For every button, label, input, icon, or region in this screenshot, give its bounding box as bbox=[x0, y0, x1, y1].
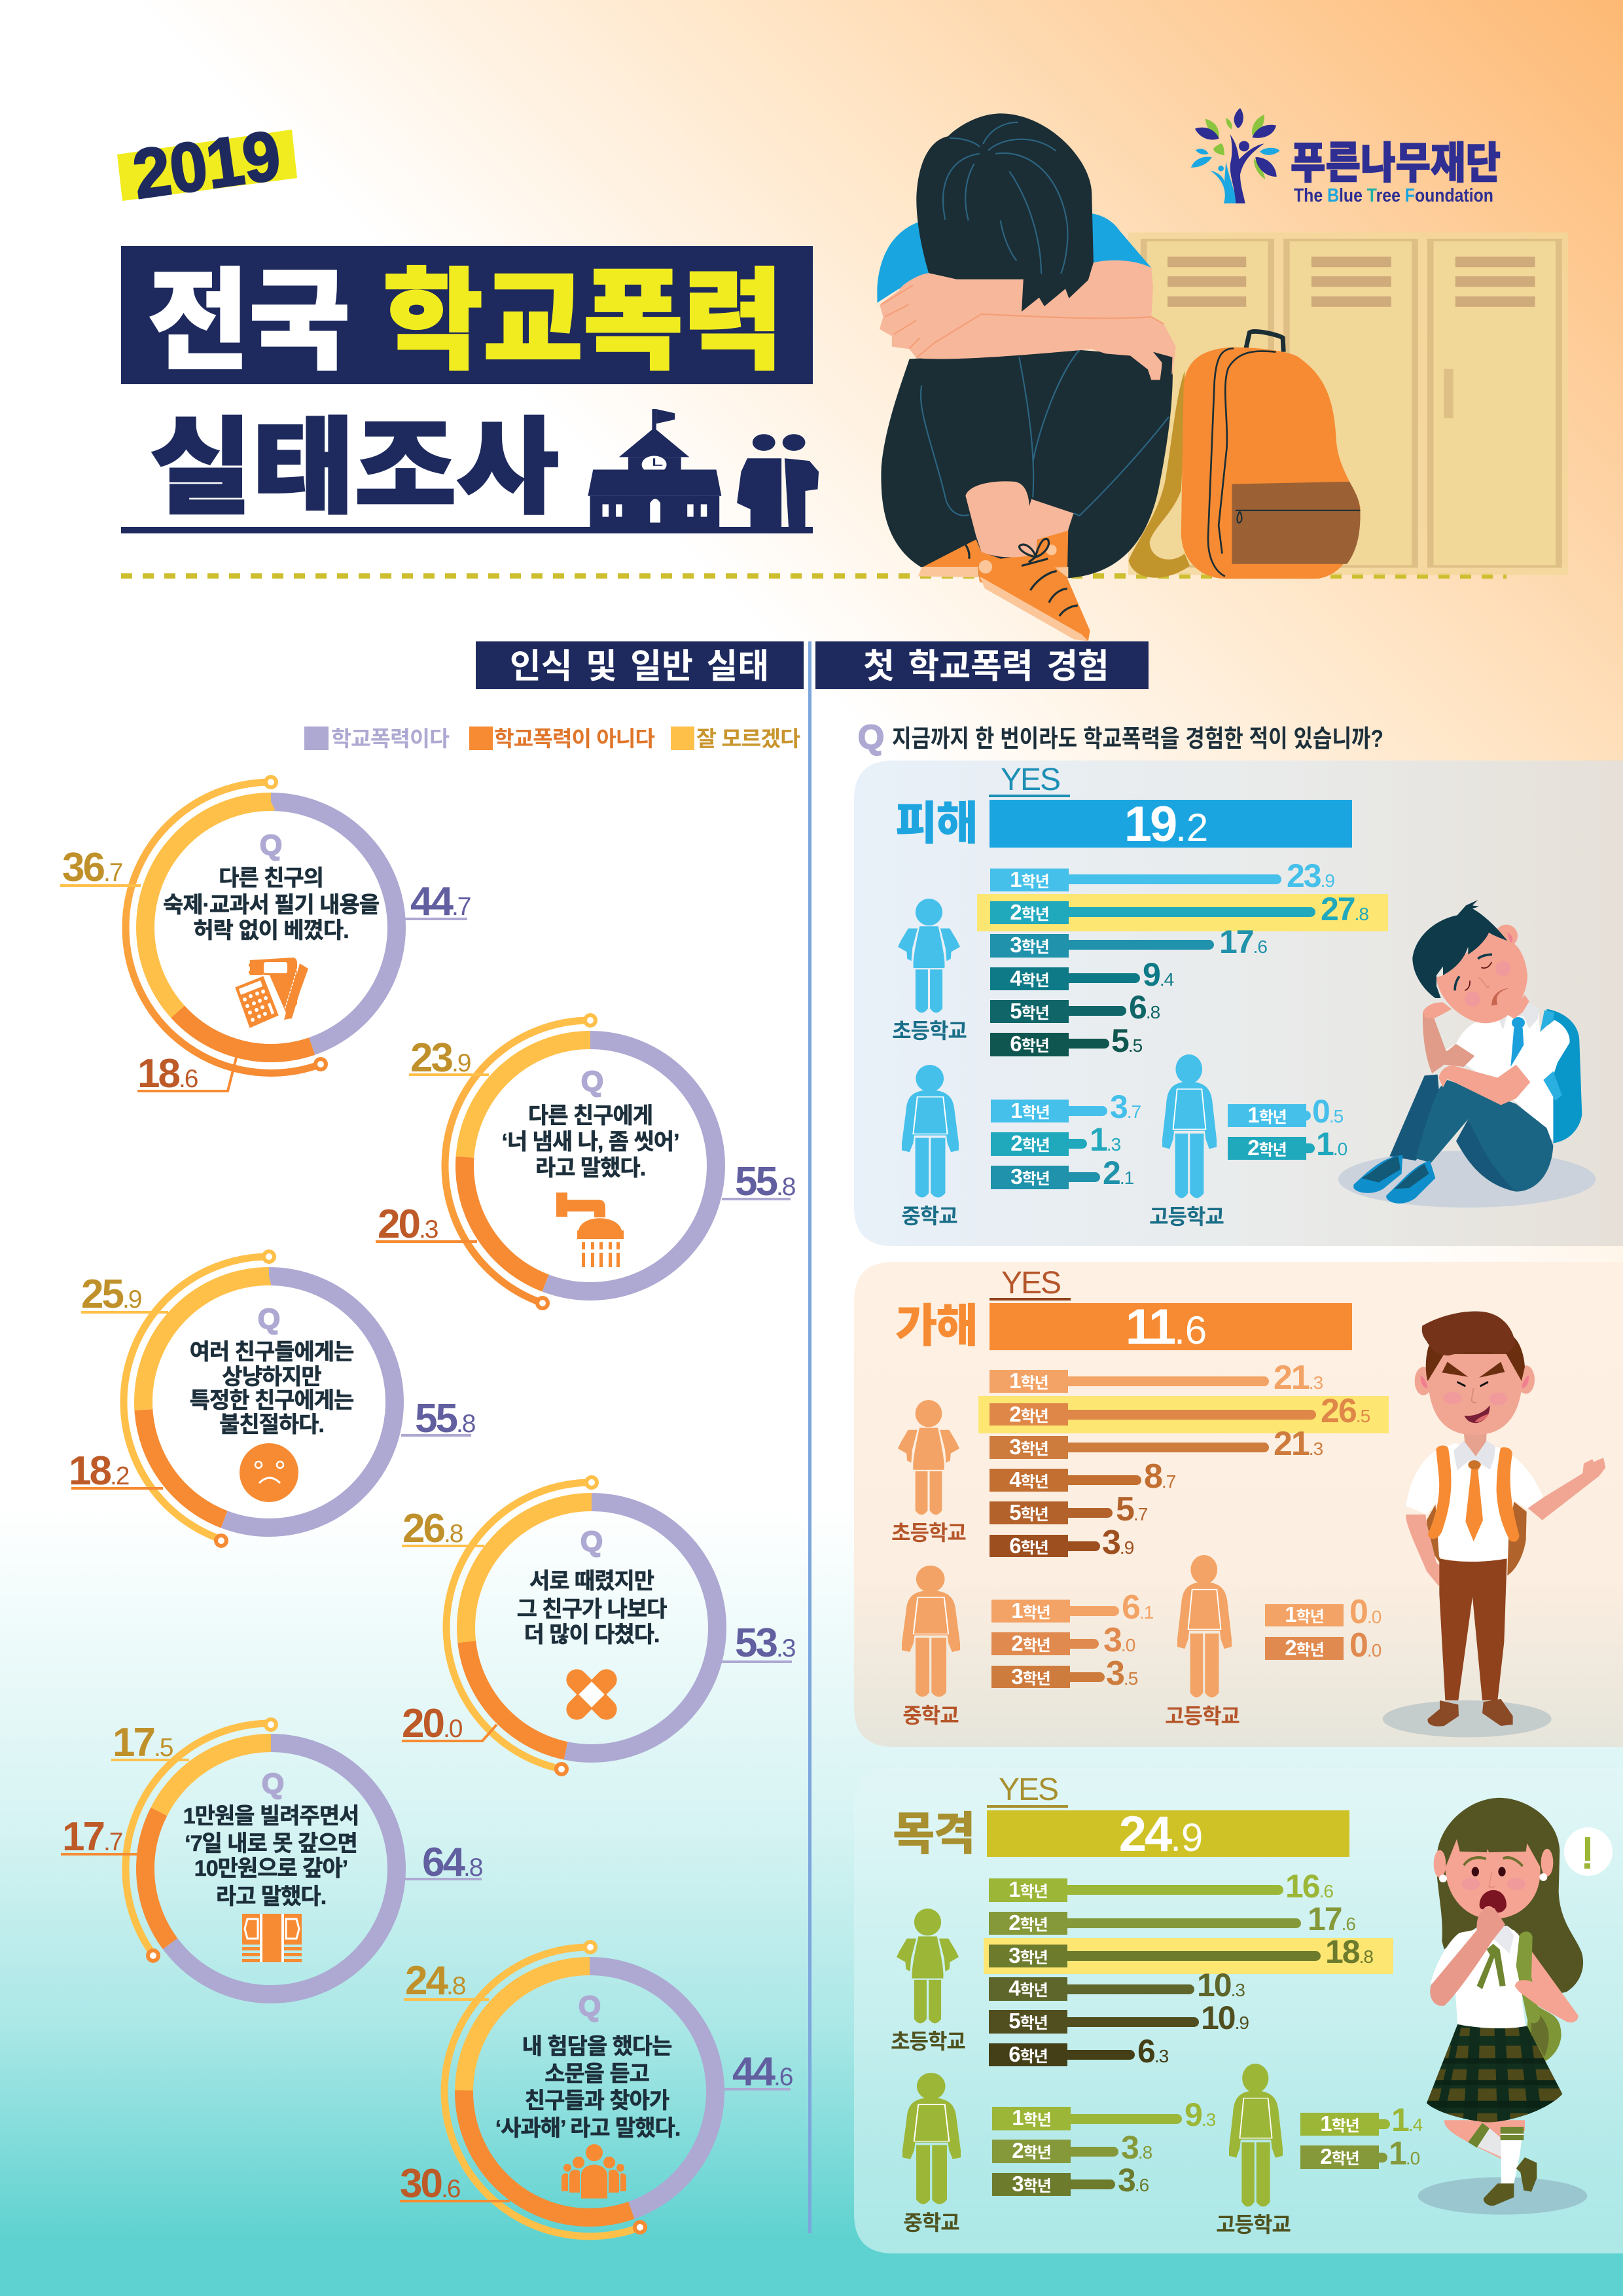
elementary grade bars: 4학년 bbox=[1009, 1467, 1048, 1492]
value labels bbox=[400, 1958, 793, 2206]
elementary grade bars: 18.8 bbox=[1325, 1933, 1373, 1970]
panel: question 2 donut bbox=[376, 1015, 795, 1308]
high school label: 고등학교 bbox=[1165, 1704, 1240, 1728]
question text: 내 험담을 했다는 bbox=[522, 2034, 671, 2059]
elementary grade bars: 2학년 bbox=[1010, 900, 1049, 924]
total bar 24.9 bbox=[987, 1806, 1349, 1862]
middle school grade bars: 3.8 bbox=[1121, 2129, 1152, 2166]
value labels bbox=[61, 1720, 482, 1885]
middle school figure bbox=[902, 2073, 961, 2204]
middle school figure bbox=[902, 1065, 959, 1198]
question text: ‘너 냄새 나, 좀 씻어’ bbox=[501, 1130, 679, 1155]
illustration: angry boy bbox=[1383, 1311, 1605, 1737]
question heading, right column: Q bbox=[858, 719, 884, 757]
icon: calculator and notebook bbox=[234, 958, 308, 1029]
elementary grade bars: 1학년 bbox=[1008, 1877, 1048, 1901]
panel: 목격 (witness) bbox=[854, 1768, 1623, 2253]
middle school grade bars: 3.5 bbox=[1106, 1655, 1138, 1693]
high school grade bars bbox=[1265, 1593, 1382, 1664]
high school grade bars bbox=[1300, 2102, 1423, 2172]
elementary grade bars bbox=[990, 1359, 1370, 1562]
panel: 피해 (victim) bbox=[854, 761, 1623, 1246]
panel: question 5 donut bbox=[61, 1719, 482, 1994]
question text bbox=[517, 1526, 667, 1647]
elementary grade bars: 6학년 bbox=[1010, 1031, 1049, 1056]
total bar 24.9: 24.9 bbox=[1119, 1806, 1203, 1862]
middle school grade bars bbox=[992, 2096, 1216, 2198]
elementary grade bars: 23.9 bbox=[1287, 857, 1334, 894]
total bar 19.2 bbox=[990, 797, 1352, 852]
high school grade bars: 1학년 bbox=[1285, 1602, 1324, 1626]
total bar 11.6 bbox=[990, 1299, 1352, 1355]
outer arc bbox=[124, 1251, 274, 1546]
outer arc bbox=[445, 1015, 596, 1308]
icon: group of people bbox=[562, 2144, 626, 2198]
elementary grade bars: 6학년 bbox=[1008, 2042, 1048, 2066]
elementary grade bars: 21.3 bbox=[1274, 1359, 1323, 1397]
elementary label: 초등학교 bbox=[892, 1019, 967, 1043]
outer arc bbox=[126, 1719, 276, 1961]
elementary grade bars: 6학년 bbox=[1009, 1534, 1048, 1558]
elementary grade bars: 9.4 bbox=[1143, 956, 1174, 993]
elementary highlight bbox=[978, 1396, 1389, 1433]
high school label: 고등학교 bbox=[1216, 2213, 1291, 2236]
middle school grade bars: 3학년 bbox=[1011, 1664, 1050, 1689]
elementary grade bars: 3학년 bbox=[1008, 1943, 1048, 1967]
section heading: 인식 및 일반 실태: 인식 및 일반 실태 bbox=[510, 648, 769, 686]
YES label: YES bbox=[1001, 762, 1060, 797]
elementary grade bars: 6.8 bbox=[1129, 989, 1160, 1026]
title: 학교폭력 bbox=[383, 260, 783, 383]
elementary grade bars: 2학년 bbox=[1008, 1910, 1048, 1935]
middle school grade bars: 2학년 bbox=[1012, 2138, 1051, 2162]
middle school grade bars: 6.1 bbox=[1122, 1588, 1154, 1626]
high school grade bars: 1.0 bbox=[1389, 2135, 1420, 2172]
value labels: 30.6 bbox=[400, 2161, 460, 2206]
question text: Q bbox=[581, 1066, 603, 1098]
icon: school and students bbox=[588, 409, 819, 529]
high school grade bars: 2학년 bbox=[1247, 1136, 1287, 1160]
icon: money bbox=[242, 1914, 302, 1962]
question text bbox=[190, 1303, 353, 1437]
middle school grade bars: 1학년 bbox=[1012, 2106, 1051, 2130]
elementary figure bbox=[898, 899, 960, 1013]
logo bbox=[1191, 108, 1501, 206]
question text: 소문을 듣고 bbox=[544, 2062, 649, 2087]
outer arc bbox=[126, 777, 326, 1073]
question text: 라고 말했다. bbox=[535, 1156, 645, 1181]
value labels bbox=[60, 845, 471, 1096]
question text: Q bbox=[580, 1526, 603, 1558]
question text bbox=[495, 1990, 680, 2141]
elementary grade bars: 17.6 bbox=[1219, 924, 1267, 960]
donut chart bbox=[145, 802, 397, 1053]
panel: question 4 donut bbox=[402, 1477, 795, 1774]
middle school grade bars: 9.3 bbox=[1185, 2096, 1216, 2133]
elementary highlight bbox=[984, 1938, 1393, 1974]
high school figure bbox=[1162, 1054, 1217, 1198]
elementary grade bars bbox=[989, 1868, 1373, 2070]
value labels: 36.7 bbox=[62, 845, 122, 890]
logo tree mark bbox=[1191, 108, 1280, 204]
kind heading: 목격 bbox=[893, 1808, 974, 1859]
panel: 가해 (perpetrator) bbox=[854, 1262, 1623, 1747]
elementary highlight bbox=[977, 894, 1388, 931]
middle school figure bbox=[902, 1566, 960, 1697]
value labels: 25.9 bbox=[81, 1272, 141, 1317]
section heading: 인식 및 일반 실태 bbox=[476, 641, 804, 689]
high school grade bars bbox=[1228, 1093, 1347, 1162]
value labels: 64.8 bbox=[422, 1840, 482, 1885]
middle school grade bars: 2.1 bbox=[1103, 1155, 1134, 1191]
high school grade bars: 0.5 bbox=[1312, 1093, 1344, 1130]
elementary figure bbox=[898, 1400, 959, 1515]
middle school grade bars: 1.3 bbox=[1090, 1121, 1121, 1158]
middle school grade bars: 3.6 bbox=[1118, 2162, 1149, 2198]
question text: Q bbox=[262, 1768, 284, 1800]
YES label: YES bbox=[999, 1772, 1058, 1807]
total bar 11.6: 11.6 bbox=[1126, 1299, 1207, 1355]
title bbox=[121, 246, 813, 533]
illustration: backpack bbox=[1128, 331, 1361, 579]
panel: question 6 donut bbox=[400, 1942, 793, 2236]
YES label: YES bbox=[1001, 1266, 1060, 1300]
elementary grade bars: 6.3 bbox=[1137, 2033, 1169, 2070]
value labels: 20.3 bbox=[378, 1202, 438, 1247]
illustration: shocked girl bbox=[1418, 1798, 1587, 2215]
middle school label: 중학교 bbox=[902, 1704, 959, 1727]
elementary grade bars: 27.8 bbox=[1321, 891, 1368, 927]
elementary grade bars: 21.3 bbox=[1274, 1425, 1323, 1463]
high school label: 고등학교 bbox=[1149, 1205, 1224, 1229]
elementary grade bars: 3학년 bbox=[1010, 933, 1049, 957]
value labels: 20.0 bbox=[402, 1701, 463, 1746]
value labels: 18.2 bbox=[69, 1448, 129, 1494]
elementary grade bars: 5학년 bbox=[1009, 1500, 1048, 1524]
question text: 숙제·교과서 필기 내용을 bbox=[163, 893, 379, 918]
value labels: 17.5 bbox=[113, 1720, 173, 1765]
elementary grade bars: 5학년 bbox=[1010, 999, 1049, 1023]
value labels: 24.8 bbox=[405, 1958, 465, 2003]
value labels: 55.8 bbox=[415, 1396, 475, 1441]
middle school grade bars: 3.0 bbox=[1103, 1621, 1135, 1659]
question text: 그 친구가 나보다 bbox=[517, 1597, 667, 1622]
logo english name: The Blue Tree Foundation bbox=[1294, 185, 1493, 206]
donut chart bbox=[464, 1966, 715, 2217]
elementary grade bars: 10.9 bbox=[1201, 2000, 1249, 2036]
middle school grade bars: 2학년 bbox=[1011, 1631, 1050, 1655]
legend bbox=[304, 726, 800, 751]
elementary figure bbox=[897, 1909, 959, 2023]
question text: 라고 말했다. bbox=[216, 1884, 326, 1909]
elementary grade bars: 16.6 bbox=[1285, 1868, 1333, 1905]
question text bbox=[163, 829, 379, 943]
question text: 여러 친구들에게는 bbox=[190, 1340, 353, 1365]
legend: 잘 모르겠다 bbox=[696, 726, 800, 751]
elementary grade bars: 4학년 bbox=[1010, 966, 1049, 990]
elementary grade bars: 5학년 bbox=[1008, 2009, 1048, 2033]
question text bbox=[501, 1066, 679, 1181]
question text: Q bbox=[258, 1303, 280, 1335]
question text: 친구들과 찾아가 bbox=[525, 2089, 669, 2113]
panel: question 1 donut bbox=[60, 777, 471, 1096]
illustration: sad boy bbox=[1338, 900, 1596, 1208]
middle school grade bars: 3학년 bbox=[1012, 2172, 1051, 2196]
elementary grade bars: 5.5 bbox=[1111, 1022, 1143, 1059]
elementary grade bars: 5.7 bbox=[1116, 1490, 1148, 1528]
value labels: 18.6 bbox=[137, 1051, 198, 1096]
high school grade bars: 0.0 bbox=[1349, 1593, 1382, 1631]
question text: ‘7일 내로 못 갚으면 bbox=[185, 1831, 357, 1856]
elementary label: 초등학교 bbox=[891, 2030, 965, 2053]
icon: shower bbox=[556, 1193, 624, 1267]
question text: 1만원을 빌려주면서 bbox=[183, 1804, 359, 1829]
question text: 10만원으로 갚아’ bbox=[194, 1856, 348, 1881]
outer arc bbox=[444, 1942, 645, 2236]
elementary grade bars bbox=[990, 857, 1368, 1059]
elementary label: 초등학교 bbox=[891, 1521, 966, 1545]
callout: exclamation bubble bbox=[1564, 1827, 1613, 1876]
legend: 학교폭력이다 bbox=[331, 726, 450, 751]
value labels: 53.3 bbox=[735, 1621, 795, 1666]
elementary grade bars: 1학년 bbox=[1009, 1369, 1048, 1393]
high school figure bbox=[1177, 1555, 1232, 1698]
value labels bbox=[69, 1272, 475, 1494]
icon: bandage bbox=[562, 1665, 621, 1724]
legend: 학교폭력이 아니다 bbox=[494, 726, 655, 751]
middle school grade bars: 3.7 bbox=[1110, 1088, 1141, 1125]
high school grade bars: 1학년 bbox=[1320, 2111, 1359, 2136]
question text: Q bbox=[579, 1990, 601, 2022]
donut chart bbox=[465, 1040, 716, 1291]
middle school grade bars: 1학년 bbox=[1010, 1098, 1050, 1122]
kind heading: 피해 bbox=[895, 798, 977, 849]
high school grade bars: 1.4 bbox=[1391, 2102, 1423, 2138]
value labels bbox=[402, 1506, 795, 1746]
question text: 허락 없이 베꼈다. bbox=[193, 918, 349, 943]
high school grade bars: 0.0 bbox=[1349, 1626, 1382, 1664]
value labels: 55.8 bbox=[735, 1159, 795, 1204]
center vertical divider bbox=[808, 641, 812, 2233]
middle school grade bars bbox=[991, 1088, 1141, 1191]
elementary grade bars: 2학년 bbox=[1009, 1402, 1048, 1426]
section heading: 첫 학교폭력 경험 bbox=[815, 641, 1149, 689]
value labels: 26.8 bbox=[402, 1506, 463, 1551]
elementary grade bars: 8.7 bbox=[1144, 1458, 1176, 1496]
question text: ‘사과해’ 라고 말했다. bbox=[495, 2116, 680, 2141]
value labels bbox=[376, 1035, 795, 1247]
value labels: 44.7 bbox=[410, 879, 471, 924]
high school figure bbox=[1229, 2064, 1283, 2207]
high school grade bars: 1학년 bbox=[1247, 1103, 1287, 1127]
donut chart bbox=[145, 1743, 397, 1994]
year badge: 2019 bbox=[128, 117, 285, 213]
elementary grade bars: 1학년 bbox=[1010, 867, 1049, 891]
middle school grade bars bbox=[991, 1588, 1154, 1693]
dashed divider bbox=[121, 573, 1507, 579]
question text: 더 많이 다쳤다. bbox=[524, 1623, 660, 1647]
value labels: 17.7 bbox=[62, 1814, 122, 1859]
high school grade bars: 2학년 bbox=[1320, 2144, 1359, 2168]
question text: 다른 친구에게 bbox=[528, 1103, 652, 1128]
question text: 다른 친구의 bbox=[219, 866, 323, 891]
middle school label: 중학교 bbox=[903, 2211, 959, 2234]
donut chart bbox=[143, 1276, 395, 1528]
total bar 19.2: 19.2 bbox=[1124, 797, 1208, 852]
value labels: 23.9 bbox=[410, 1035, 471, 1081]
question text: 서로 때렸지만 bbox=[529, 1569, 654, 1594]
question heading, right column: 지금까지 한 번이라도 학교폭력을 경험한 적이 있습니까? bbox=[892, 725, 1383, 752]
middle school label: 중학교 bbox=[901, 1204, 957, 1228]
middle school grade bars: 2학년 bbox=[1010, 1131, 1050, 1155]
elementary grade bars: 10.3 bbox=[1197, 1967, 1245, 2003]
elementary grade bars: 3.9 bbox=[1102, 1524, 1134, 1562]
title: 실태조사 bbox=[150, 409, 559, 526]
elementary grade bars: 4학년 bbox=[1008, 1976, 1048, 2000]
panel: question 3 donut bbox=[69, 1251, 475, 1546]
elementary grade bars: 26.5 bbox=[1321, 1392, 1370, 1430]
question text: 상냥하지만 bbox=[222, 1365, 321, 1390]
title: 전국 bbox=[148, 260, 350, 383]
high school grade bars: 1.0 bbox=[1316, 1126, 1347, 1162]
middle school grade bars: 1학년 bbox=[1011, 1598, 1050, 1623]
question text: 특정한 친구에게는 bbox=[190, 1388, 353, 1413]
logo wordmark: 푸른나무재단 bbox=[1291, 139, 1501, 187]
donut chart bbox=[466, 1502, 717, 1753]
question heading, right column bbox=[858, 719, 1383, 757]
high school grade bars: 2학년 bbox=[1285, 1636, 1324, 1660]
illustration: lockers bbox=[1128, 232, 1568, 575]
value labels: 44.6 bbox=[732, 2049, 793, 2094]
question text bbox=[183, 1768, 359, 1909]
outer arc bbox=[446, 1477, 597, 1774]
elementary grade bars: 3학년 bbox=[1009, 1435, 1048, 1459]
icon: sad face bbox=[240, 1443, 298, 1502]
section heading: 첫 학교폭력 경험: 첫 학교폭력 경험 bbox=[863, 648, 1109, 686]
illustration: sad girl hugging knees bbox=[877, 113, 1176, 641]
elementary grade bars: 17.6 bbox=[1308, 1901, 1355, 1937]
question text: 불친절하다. bbox=[219, 1412, 324, 1437]
kind heading: 가해 bbox=[895, 1300, 977, 1352]
middle school grade bars: 3학년 bbox=[1010, 1164, 1050, 1189]
question text: Q bbox=[260, 829, 282, 861]
